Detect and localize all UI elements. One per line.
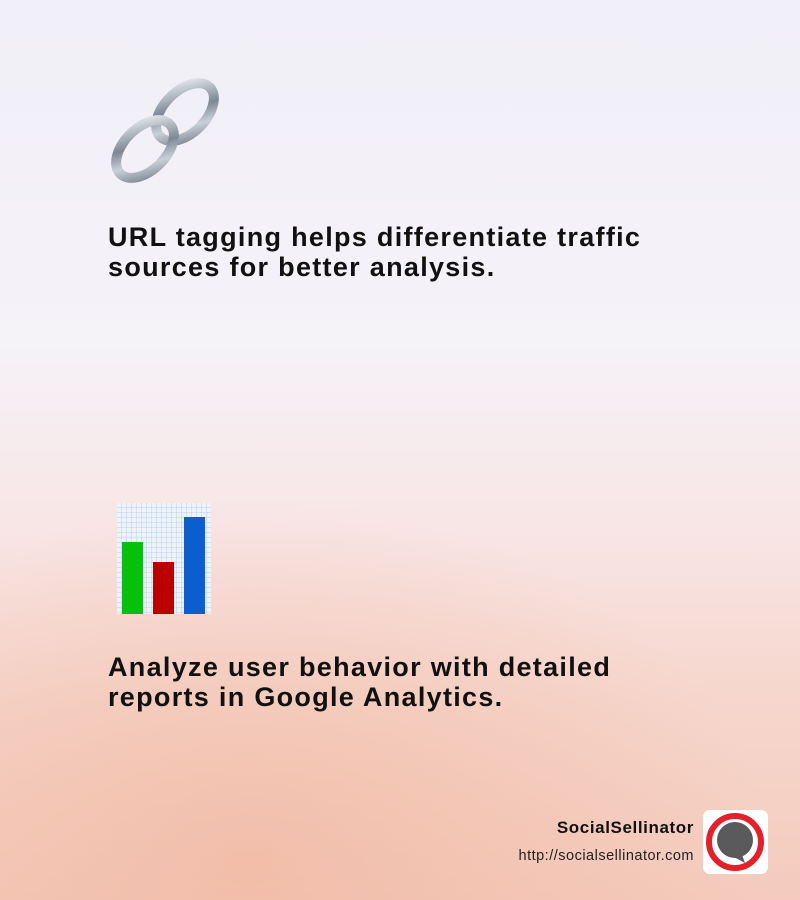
heading: url tagging: sources for better analysis.	[108, 252, 496, 282]
brand url: http://socialsellinator.com	[518, 848, 694, 864]
brand name: SocialSellinator	[557, 818, 694, 837]
heading: analyze	[108, 652, 611, 712]
heading: url tagging	[108, 222, 641, 282]
heading: analyze: reports in Google Analytics.	[108, 682, 503, 712]
heading: analyze: Analyze user behavior with detailed	[108, 652, 611, 682]
icon: bar chart	[117, 503, 211, 614]
heading: url tagging: URL tagging helps differentiate traffic	[108, 222, 641, 252]
logo	[703, 810, 768, 874]
icon: chain link	[111, 78, 219, 183]
